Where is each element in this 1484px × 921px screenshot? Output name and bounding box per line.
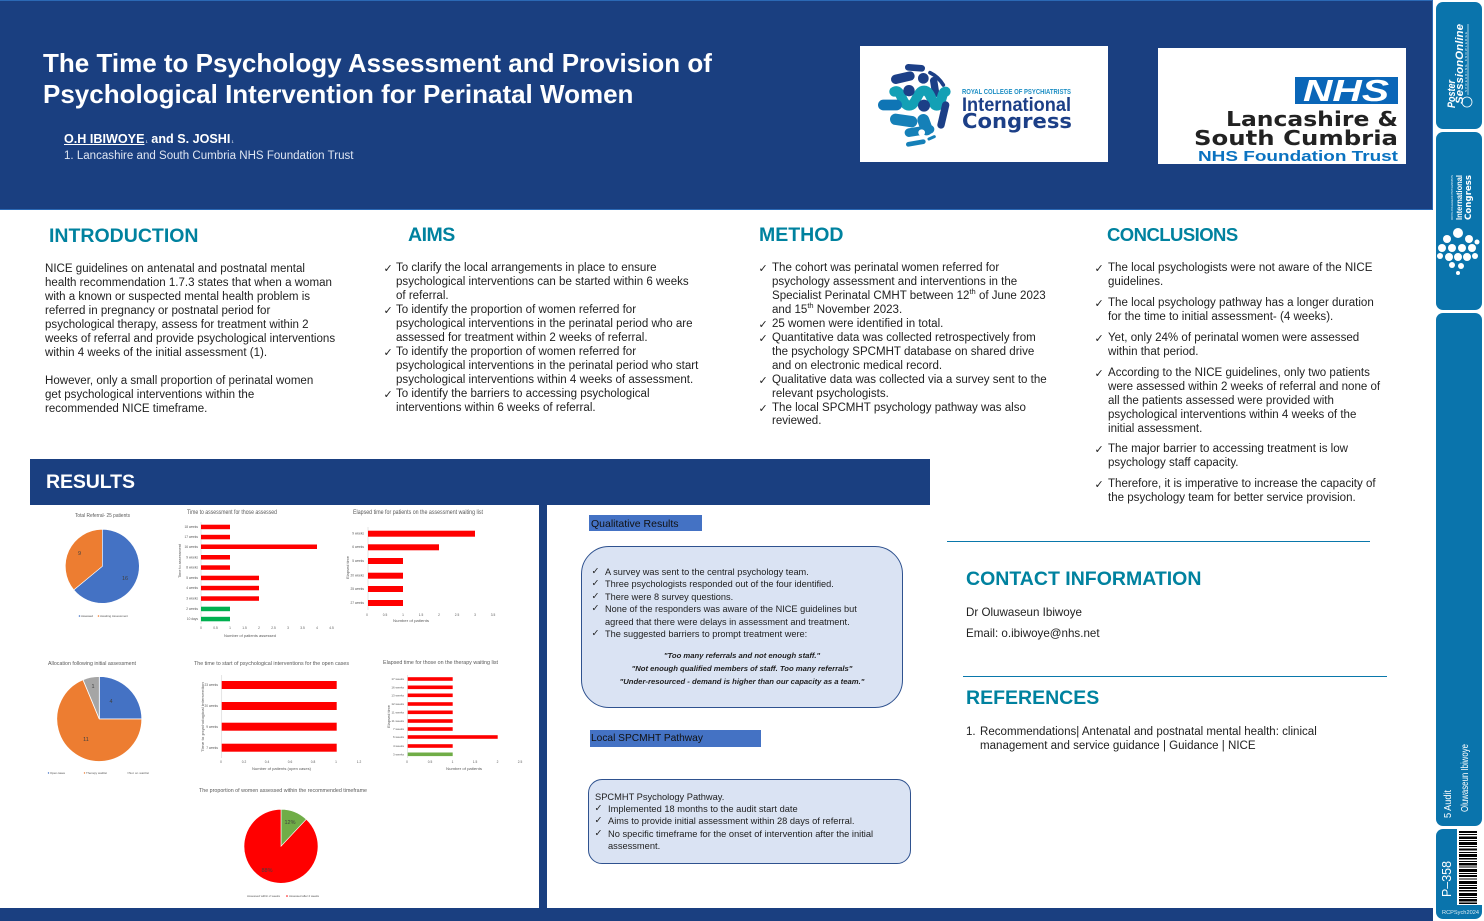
sidebar block: International Congress: [1436, 132, 1482, 310]
bar chart: elapsed time therapy waiting list: 16 weeks: [391, 686, 404, 690]
pie chart: proportion assessed within timeframe: 88%: [261, 868, 273, 874]
bar chart: elapsed time assessment waiting list: 3.5: [491, 613, 495, 617]
list: method: Quantitative data was collected retrospectively from: [772, 332, 1036, 344]
list: conclusions: guidelines.: [1108, 276, 1163, 288]
text: contact details: Dr Oluwaseun Ibiwoye: [966, 606, 1082, 619]
text: introduction body: get psychological interventions within the: [45, 389, 254, 401]
bar chart: elapsed time therapy waiting list: Elapsed time for those on the therapy waiting list: [383, 660, 498, 666]
bar chart: elapsed time assessment waiting list: 0: [366, 613, 368, 617]
list: conclusions: the psychology team for better service provision.: [1108, 492, 1356, 504]
text: contact details: [966, 606, 1100, 640]
list: method: [760, 262, 1047, 427]
list: aims: To identify the proportion of women referred for: [396, 346, 636, 358]
bar chart: time to assessment: Number of patients assessed: [224, 634, 276, 638]
bar chart: elapsed time therapy waiting list: 6 weeks: [393, 735, 404, 739]
quotes: [620, 651, 864, 686]
bar chart: time to assessment: Time to assessment for those assessed: [187, 510, 277, 516]
bar chart: time to assessment: 4: [316, 626, 318, 630]
text: introduction body: referred in pregnancy or postnatal period for: [45, 305, 270, 317]
sidebar block: Poster Session Online: [1436, 2, 1482, 129]
pie chart: total referral: Awaiting Assessment: [100, 614, 128, 618]
sidebar block: author: Oluwaseun Ibiwoye: [1459, 744, 1471, 812]
list: conclusions: [1096, 262, 1380, 504]
bar chart: time to start psychological interventions: Time to psychological intervention: [201, 682, 205, 752]
bar chart: time to assessment: 4 weeks: [186, 586, 198, 590]
pie chart: proportion assessed within timeframe: Assessed within 2 weeks: [247, 894, 280, 898]
logo text: [962, 89, 1072, 133]
bar chart: elapsed time therapy waiting list: 11 weeks: [392, 710, 404, 714]
sidebar: [1436, 2, 1482, 919]
bar chart: elapsed time therapy waiting list: 4 weeks: [393, 744, 404, 748]
list: survey findings: A survey was sent to the central psychology team.: [605, 567, 809, 577]
bar chart: elapsed time therapy waiting list: 7 weeks: [393, 727, 404, 731]
list: aims: psychological interventions in the perinatal period who start: [396, 360, 698, 372]
text: pathway details: [595, 792, 873, 851]
list: survey findings: agreed that there were delays in assessment and treatment.: [605, 617, 850, 627]
sidebar block: author: [1436, 313, 1482, 826]
bar chart: elapsed time assessment waiting list: [346, 510, 495, 623]
pie chart: total referral: Assessed: [81, 614, 93, 618]
pie chart: proportion assessed within timeframe: The proportion of women assessed within the recommended timeframe: [199, 788, 367, 794]
bar chart: time to assessment: 8 weeks: [186, 566, 198, 570]
panel: conclusions: [1096, 224, 1380, 504]
text: introduction body: health recommendation 1.7.3 states that when a woman: [45, 277, 332, 289]
list: conclusions: psychology staff capacity.: [1108, 457, 1239, 469]
bar chart: elapsed time assessment waiting list: 1.5: [419, 613, 423, 617]
text: reference 1: [966, 726, 1317, 752]
bar chart: time to assessment: 10 days: [187, 617, 198, 621]
bar chart: time to assessment: 16 weeks: [185, 545, 198, 549]
pie chart: total referral: [65, 513, 139, 618]
quotes: "Under-resourced - demand is higher than our capacity as a team.": [620, 677, 864, 686]
list: survey findings: [592, 567, 857, 639]
bar chart: time to assessment: 0: [200, 626, 202, 630]
bar chart: time to assessment: 2.5: [271, 626, 276, 630]
text: introduction body: psychological therapy, assess for treatment within 2: [45, 319, 309, 331]
sidebar block: Poster Session Online: SessionOnline: [1454, 24, 1466, 104]
text: pathway details: assessment.: [608, 841, 660, 851]
bar chart: time to assessment: 9 weeks: [186, 556, 198, 560]
logo text: International: [962, 95, 1071, 116]
bar chart: time to assessment: 4.5: [329, 626, 334, 630]
header band: [0, 0, 1433, 210]
bar chart: elapsed time assessment waiting list: 0.5: [383, 613, 387, 617]
list: conclusions: all the patients assessed were provided with: [1108, 395, 1334, 407]
list: aims: of referral.: [396, 290, 449, 302]
bar chart: elapsed time assessment waiting list: Elapsed time: [346, 556, 350, 579]
heading: introduction: INTRODUCTION: [49, 224, 198, 246]
list: conclusions: within that period.: [1108, 346, 1199, 358]
title: Psychological Intervention for Perinatal Women: [43, 79, 633, 109]
pie chart: allocation following initial assessment: Not on waitlist: [129, 771, 149, 775]
heading: results: RESULTS: [46, 471, 135, 493]
bar chart: time to start psychological interventions: [194, 661, 361, 771]
bar chart: time to start psychological interventions: 20 weeks: [205, 704, 218, 708]
bar chart: time to start psychological interventions: The time to start of psychological interventions for the open cases: [194, 661, 349, 667]
bar chart: elapsed time assessment waiting list: 25 weeks: [351, 587, 364, 591]
list: conclusions: psychological interventions within 4 weeks of the: [1108, 409, 1356, 421]
list: method: psychology assessment and interventions in the: [772, 276, 1017, 288]
bar chart: time to start psychological interventions: 7 weeks: [206, 746, 218, 750]
results banner: [30, 459, 930, 505]
affiliation: 1. Lancashire and South Cumbria NHS Foundation Trust: [64, 150, 353, 162]
list: conclusions: for the time to initial assessment- (4 weeks).: [1108, 311, 1333, 323]
results divider bar: [539, 505, 547, 908]
bar chart: time to assessment: 5 weeks: [186, 576, 198, 580]
panel: qualitative results: [581, 546, 903, 708]
text: pathway details: Aims to provide initial assessment within 28 days of referral.: [608, 816, 854, 826]
text: pathway details: Implemented 18 months to the audit start date: [608, 804, 798, 814]
sidebar block: poster number and barcode: P–358: [1439, 861, 1454, 897]
list: survey findings: None of the responders was aware of the NICE guidelines but: [605, 604, 857, 614]
label: qualitative results: [589, 515, 702, 531]
bar chart: elapsed time therapy waiting list: 0: [406, 760, 408, 764]
list: conclusions: Therefore, it is imperative to increase the capacity of: [1108, 478, 1376, 490]
NHS lozenge: [1295, 77, 1398, 104]
bar chart: elapsed time therapy waiting list: 3 weeks: [393, 752, 404, 756]
text: introduction body: NICE guidelines on antenatal and postnatal mental: [45, 263, 305, 275]
text: introduction body: [45, 263, 335, 415]
text: introduction body: recommended NICE timeframe.: [45, 403, 207, 415]
bar chart: time to assessment: Time to assessment: [178, 543, 182, 578]
list: conclusions: initial assessment.: [1108, 423, 1202, 435]
list: conclusions: Yet, only 24% of perinatal women were assessed: [1108, 332, 1359, 344]
logo text: Congress: [962, 109, 1072, 133]
bar chart: elapsed time assessment waiting list: 2.5: [455, 613, 459, 617]
bar chart: time to start psychological interventions: 9 weeks: [206, 725, 218, 729]
bar chart: time to assessment: 1.5: [242, 626, 247, 630]
label: qualitative results: Qualitative Results: [591, 518, 679, 530]
pie chart: total referral: 9: [78, 551, 81, 557]
bar chart: time to start psychological interventions: 0.8: [311, 760, 315, 764]
list: method: The local SPCMHT psychology pathway was also: [772, 402, 1026, 414]
bar chart: time to assessment: 3: [287, 626, 289, 630]
bar chart: time to assessment: 2: [258, 626, 260, 630]
bar chart: elapsed time assessment waiting list: 27 weeks: [351, 601, 364, 605]
sidebar block: Poster Session Online: SPREADING KNOWLEDGE: [1464, 32, 1468, 92]
pie chart: allocation following initial assessment: 4: [109, 699, 113, 705]
bar chart: elapsed time therapy waiting list: 1: [452, 760, 454, 764]
bar chart: elapsed time assessment waiting list: Number of patients: [393, 619, 429, 623]
bar chart: time to start psychological interventions: 0.4: [265, 760, 269, 764]
pie chart: proportion assessed within timeframe: Assessed after 2 weeks: [289, 894, 320, 898]
bar chart: time to start psychological interventions: 0.6: [288, 760, 292, 764]
bar chart: elapsed time therapy waiting list: 2: [497, 760, 499, 764]
list: method: Specialist Perinatal CMHT between 12th of June 2023: [772, 287, 1046, 302]
list: conclusions: The local psychologists were not aware of the NICE: [1108, 262, 1372, 274]
heading: method: METHOD: [759, 224, 844, 246]
logo: NHS Lancashire and South Cumbria: NHS: [1303, 73, 1389, 108]
list: aims: To clarify the local arrangements in place to ensure: [396, 262, 657, 274]
label: local SPCMHT pathway: [590, 730, 761, 747]
bar chart: elapsed time assessment waiting list: 6 weeks: [352, 545, 364, 549]
bar chart: time to assessment: 2 weeks: [186, 607, 198, 611]
list: method: The cohort was perinatal women referred for: [772, 262, 999, 274]
list: survey findings: The suggested barriers to prompt treatment were:: [605, 629, 807, 639]
list: aims: psychological interventions can be started within 6 weeks: [396, 276, 689, 288]
list: aims: psychological interventions in the perinatal period who are: [396, 318, 693, 330]
list: aims: assessed for treatment within 2 weeks of referral.: [396, 332, 648, 344]
text: pathway details: No specific timeframe for the onset of intervention after the initial: [608, 829, 873, 839]
bar chart: elapsed time assessment waiting list: 5 weeks: [352, 559, 364, 563]
bar chart: elapsed time assessment waiting list: 9 weeks: [352, 532, 364, 536]
bar chart: elapsed time therapy waiting list: Number of patients: [446, 767, 482, 771]
logo text: ROYAL COLLEGE OF PSYCHIATRISTS: [962, 89, 1071, 96]
pie chart: allocation following initial assessment: Open cases: [50, 771, 66, 775]
bar chart: elapsed time assessment waiting list: 2: [438, 613, 440, 617]
bar chart: elapsed time therapy waiting list: 2.5: [518, 760, 522, 764]
sidebar block: International Congress: Congress: [1464, 175, 1474, 220]
list: aims: To identify the barriers to accessing psychological: [396, 388, 650, 400]
list: aims: [385, 262, 698, 414]
sidebar block: poster number and barcode: [1436, 829, 1482, 919]
logo: Royal College of Psychiatrists International Congress: [860, 46, 1108, 162]
text: contact details: Email: o.ibiwoye@nhs.net: [966, 627, 1100, 640]
footer band: [0, 908, 1433, 921]
heading: aims: AIMS: [408, 224, 455, 246]
bar chart: time to assessment: 0.5: [213, 626, 218, 630]
heading: references: REFERENCES: [966, 686, 1099, 708]
text: introduction body: within 4 weeks of the initial assessment (1).: [45, 347, 267, 359]
pie chart: allocation following initial assessment: Allocation following initial assessment: [48, 661, 136, 667]
list: aims: interventions within 6 weeks of referral.: [396, 402, 596, 414]
list: aims: psychological interventions within 4 weeks of assessment.: [396, 374, 693, 386]
bar chart: time to assessment: 18 weeks: [185, 525, 198, 529]
list: survey findings: Three psychologists responded out of the four identified.: [605, 579, 834, 589]
bar chart: time to start psychological interventions: 23 weeks: [205, 683, 218, 687]
pie chart: allocation following initial assessment: 11: [83, 737, 89, 743]
list: method: and 15th November 2023.: [772, 301, 902, 316]
bar chart: elapsed time assessment waiting list: 1: [402, 613, 404, 617]
panel: method: [759, 224, 1047, 427]
list: conclusions: were assessed within 2 weeks of referral and none of: [1108, 381, 1380, 393]
label: local SPCMHT pathway: Local SPCMHT Pathway: [591, 733, 703, 744]
bar chart: elapsed time therapy waiting list: 1.5: [473, 760, 477, 764]
pie chart: proportion assessed within timeframe: 12%: [284, 820, 296, 826]
quotes: "Too many referrals and not enough staff.": [664, 651, 820, 660]
bar chart: elapsed time therapy waiting list: 12 weeks: [391, 702, 404, 706]
pie chart: total referral: 16: [122, 576, 128, 582]
list: method: and on electronic medical record.: [772, 360, 942, 372]
text: reference 1: management and service guidance | Guidance | NICE: [980, 740, 1256, 752]
quotes: "Not enough qualified members of staff. Too many referrals": [632, 664, 852, 673]
list: aims: To identify the proportion of women referred for: [396, 304, 636, 316]
list: method: relevant psychologists.: [772, 388, 889, 400]
logo: NHS Lancashire and South Cumbria: South Cumbria: [1194, 126, 1398, 150]
bar chart: time to start psychological interventions: 1: [335, 760, 337, 764]
bar chart: elapsed time assessment waiting list: 20 weeks: [351, 574, 364, 578]
text: introduction body: However, only a small proportion of perinatal women: [45, 375, 313, 387]
heading: conclusions: CONCLUSIONS: [1107, 224, 1238, 245]
icon: molecular globe: [883, 67, 946, 144]
bar chart: elapsed time therapy waiting list: 17 weeks: [391, 677, 404, 681]
panel: contact information: [947, 541, 1370, 644]
text: reference 1: Recommendations| Antenatal and postnatal mental health: clinical: [980, 726, 1317, 738]
pie chart: total referral: Total Referral- 25 patients: [75, 513, 130, 519]
panel: introduction: [45, 224, 335, 415]
bar chart: time to start psychological interventions: Number of patients (open cases): [252, 767, 312, 771]
text: reference 1: 1.: [966, 726, 976, 738]
bar chart: time to assessment: [178, 510, 334, 638]
bar chart: time to start psychological interventions: 0.2: [242, 760, 246, 764]
bar chart: time to assessment: 3.5: [300, 626, 305, 630]
text: introduction body: weeks of referral and provide psychological interventions: [45, 333, 335, 345]
list: method: reviewed.: [772, 415, 821, 427]
list: conclusions: The local psychology pathway has a longer duration: [1108, 297, 1374, 309]
sidebar block: author: 5 Audit: [1442, 790, 1454, 818]
sidebar block: International Congress: ROYAL COLLEGE OF PSYCHIATRISTS: [1450, 175, 1454, 220]
panel: aims: [385, 224, 698, 414]
title: The Time to Psychology Assessment and Provision of: [43, 48, 712, 78]
bar chart: elapsed time therapy waiting list: [383, 660, 522, 771]
list: method: the psychology SPCMHT database on shared drive: [772, 346, 1034, 358]
pie chart: proportion assessed within timeframe: [199, 788, 367, 898]
bar chart: elapsed time assessment waiting list: Elapsed time for patients on the assessment waiting list: [353, 510, 483, 516]
bar chart: time to assessment: 3 weeks: [186, 596, 198, 600]
bar chart: time to start psychological interventions: 1.2: [357, 760, 361, 764]
logo: NHS Lancashire and South Cumbria: [1158, 48, 1406, 164]
text: introduction body: with a known or suspected mental health problem is: [45, 291, 310, 303]
bar chart: time to start psychological interventions: 0: [220, 760, 222, 764]
bar chart: elapsed time therapy waiting list: 11 weeks: [392, 719, 404, 723]
bar chart: time to assessment: 17 weeks: [185, 535, 198, 539]
bar chart: elapsed time therapy waiting list: 0.5: [428, 760, 432, 764]
logo: NHS Lancashire and South Cumbria: Lancashire &: [1226, 107, 1398, 131]
panel: SPCMHT psychology pathway: [588, 779, 911, 864]
bar chart: time to assessment: 1: [229, 626, 231, 630]
authors: O.H IBIWOYE 1 and S. JOSHI 1: [64, 132, 234, 146]
list: method: Qualitative data was collected via a survey sent to the: [772, 374, 1047, 386]
bar chart: elapsed time therapy waiting list: Elapsed time: [387, 705, 391, 728]
heading: contact: CONTACT INFORMATION: [966, 568, 1201, 590]
list: method: 25 women were identified in total.: [772, 318, 943, 330]
pie chart: allocation following initial assessment: Therapy waitlist: [86, 771, 107, 775]
sidebar block: Poster Session Online: Poster: [1446, 79, 1458, 108]
pie chart: allocation following initial assessment: 1: [91, 684, 95, 690]
list: conclusions: The major barrier to accessing treatment is low: [1108, 443, 1348, 455]
panel: references: [963, 676, 1387, 755]
bar chart: elapsed time therapy waiting list: 13 weeks: [391, 694, 404, 698]
bar chart: elapsed time assessment waiting list: 3: [474, 613, 476, 617]
sidebar block: International Congress: International: [1454, 175, 1464, 220]
list: survey findings: There were 8 survey questions.: [605, 592, 733, 602]
sidebar block: poster number and barcode: RCPSych2024: [1442, 910, 1479, 916]
pie chart: allocation following initial assessment: [48, 661, 149, 775]
text: pathway details: SPCMHT Psychology Pathway.: [595, 792, 724, 802]
title: [43, 48, 712, 109]
list: conclusions: According to the NICE guidelines, only two patients: [1108, 367, 1370, 379]
